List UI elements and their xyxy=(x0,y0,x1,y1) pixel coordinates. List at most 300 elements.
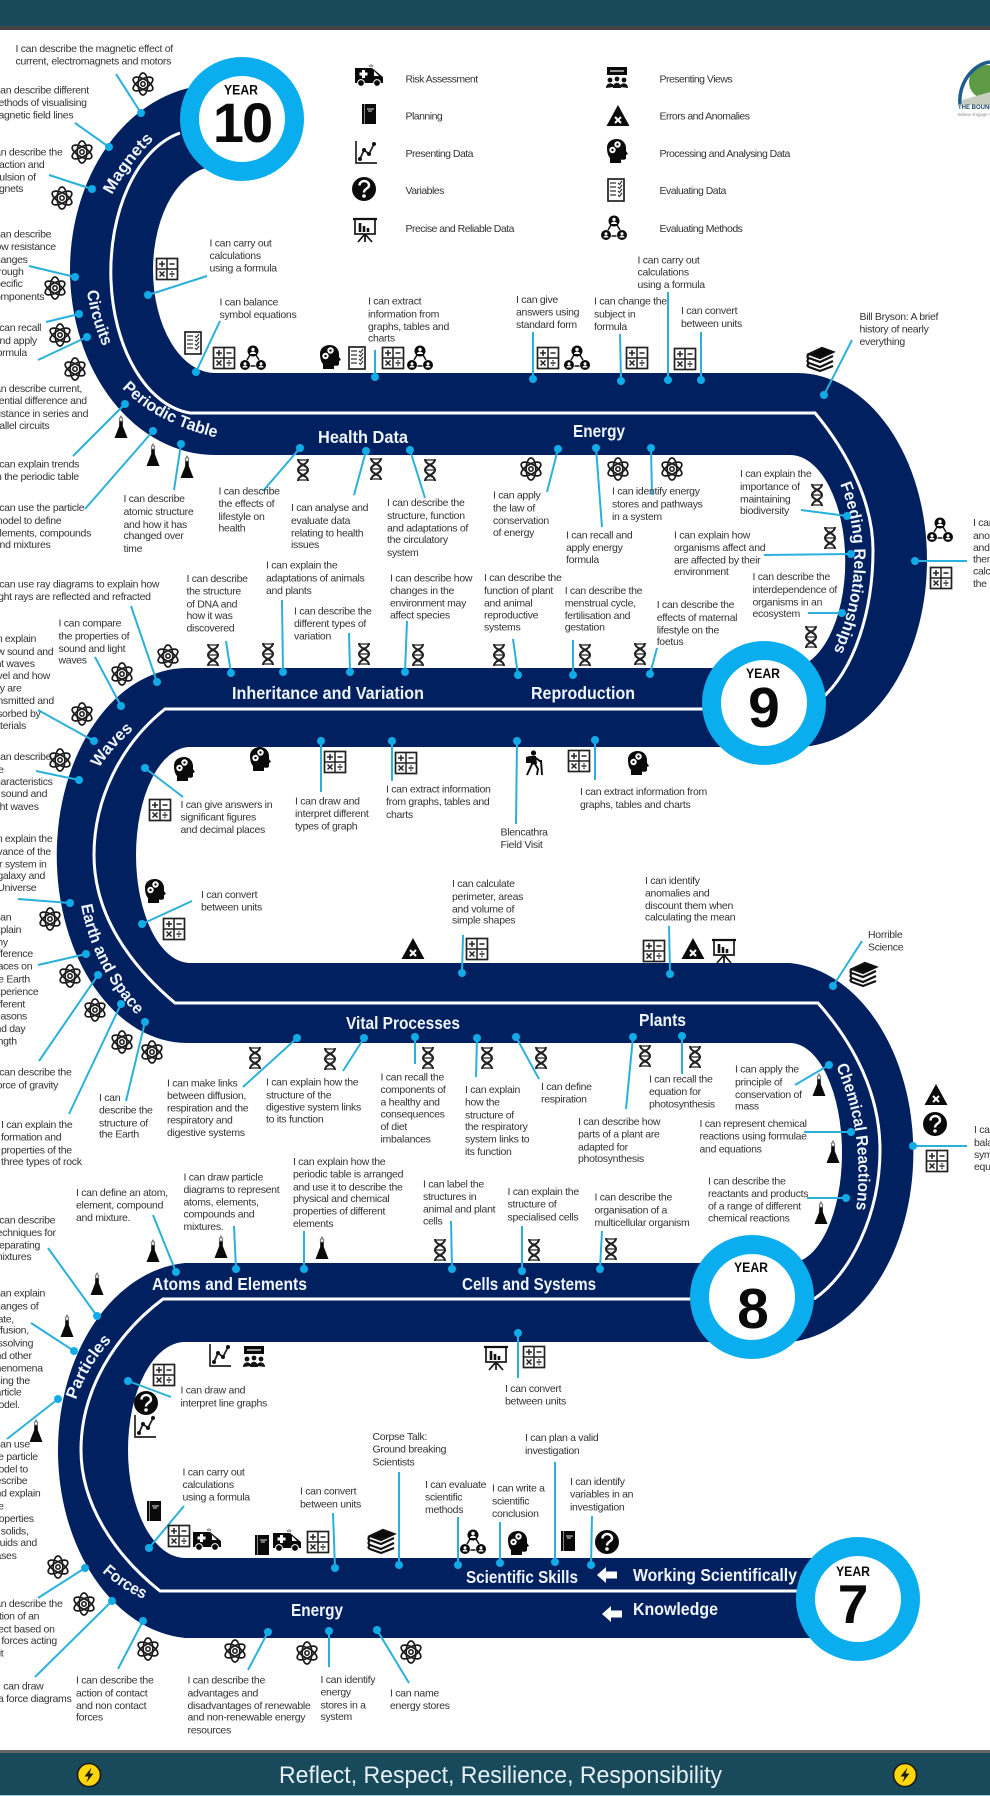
icon: atom xyxy=(83,999,107,1021)
callout: define atom: and mixture. xyxy=(76,1212,130,1224)
callout: organisms and environment: are affected by their xyxy=(674,555,761,567)
callout: healthy diet xyxy=(380,1033,446,1146)
callout: energy stores and pathways: stores and pathways xyxy=(612,498,703,510)
callout: motion and forces xyxy=(0,1564,89,1659)
callout: resistance xyxy=(0,229,79,303)
callout: convert units: between units xyxy=(681,318,742,330)
callout: periodic table arrangement: physical and chemical xyxy=(293,1193,389,1205)
icon: atom xyxy=(136,1638,160,1660)
callout: variation: I can describe the xyxy=(294,605,372,617)
icon: dna xyxy=(435,1239,445,1261)
callout: label cells: structures in xyxy=(423,1191,477,1203)
callout: define respiration: I can define xyxy=(541,1081,592,1093)
callout: waves travel xyxy=(0,633,98,745)
callout: structure of the Earth: structure of xyxy=(99,1117,148,1129)
header bar xyxy=(0,0,990,30)
callout: health data: I can analyse and xyxy=(291,502,369,514)
icon: presenting views xyxy=(606,67,628,88)
callout: periodic table arrangement: properties of different xyxy=(293,1205,386,1217)
callout: specialised cells: I can explain the xyxy=(508,1186,579,1198)
callout: links between diffusion: respiratory and xyxy=(167,1114,233,1126)
callout: periodic table arrangement: periodic table is arranged xyxy=(293,1169,404,1181)
callout: Corpse Talk: Scientists xyxy=(372,1456,414,1468)
icon: atom xyxy=(399,1641,423,1663)
callout: conservation of energy: the law of xyxy=(493,502,535,514)
icon: calculator xyxy=(150,800,170,820)
callout: health data xyxy=(291,447,370,551)
heading: Forces: Forces xyxy=(102,1564,146,1598)
icon: atom xyxy=(70,141,94,163)
icon: atom xyxy=(72,1593,96,1615)
callout: structure of DNA: discovered xyxy=(186,623,235,635)
callout: calculations formula xyxy=(145,1466,250,1552)
track: year 8 to year 7 xyxy=(58,1263,858,1638)
callout: reproductive systems: reproductive xyxy=(484,609,539,621)
callout: plant adaptations: parts of a plant are xyxy=(578,1129,660,1141)
heading: Reproduction: Reproduction xyxy=(531,683,635,703)
callout: reproductive systems xyxy=(484,572,562,679)
callout: atomic structure: changed over xyxy=(124,530,184,542)
callout: particle diagrams: diagrams to represent xyxy=(184,1184,280,1196)
callout: multicellular organism xyxy=(594,1192,690,1273)
callout: multicellular organism: organisation of a xyxy=(594,1204,667,1216)
icon: flask xyxy=(60,1314,74,1337)
callout: significant figures: I can give answers in xyxy=(180,799,273,811)
icon: dna xyxy=(635,643,645,665)
callout: digestive system: I can explain how the xyxy=(266,1077,359,1089)
callout: Bill Bryson xyxy=(820,311,939,399)
callout: menstrual cycle: I can describe the xyxy=(565,585,643,597)
icon: presenting views xyxy=(243,1346,265,1367)
callout: reproductive systems: function of plant xyxy=(484,585,553,597)
callout: extract information: from graphs, tables and xyxy=(386,796,490,808)
callout: conservation of energy: I can apply xyxy=(493,490,542,502)
icon: flask xyxy=(114,416,128,438)
callout: particle diagrams: compounds and xyxy=(184,1208,255,1220)
callout: interdependence: interdependence of xyxy=(752,584,837,596)
icon: atom xyxy=(110,1031,134,1053)
callout: extract information: charts xyxy=(368,333,395,345)
callout: types of rock: I can explain the xyxy=(1,1119,73,1131)
callout: biodiversity: I can explain the xyxy=(740,468,812,480)
callout: convert units: I can convert xyxy=(505,1383,562,1395)
callout: maternal lifestyle: effects of maternal xyxy=(657,612,737,624)
callout: reactants and products: reactants and products xyxy=(708,1188,808,1200)
callout: periodic trends xyxy=(0,400,129,483)
icon: dna xyxy=(606,1238,616,1260)
callout: name energy stores xyxy=(373,1626,450,1712)
callout: evaluate methods: scientific xyxy=(425,1491,462,1503)
icon: planning xyxy=(362,104,376,124)
icon: errors xyxy=(402,938,424,959)
callout: circulatory system xyxy=(387,446,468,559)
callout: maternal lifestyle xyxy=(646,599,737,678)
icon: calculator xyxy=(626,348,648,368)
callout: energy formula: formula xyxy=(566,554,599,566)
icon: head xyxy=(508,1531,529,1555)
callout: conservation of energy: conservation xyxy=(493,515,549,527)
callout: standard form: I can give xyxy=(516,294,558,306)
callout: organisms and environment: I can explain how xyxy=(674,529,751,541)
callout: effects of lifestyle: the effects of xyxy=(218,498,275,510)
callout: respiratory system: its function xyxy=(465,1146,512,1158)
callout: define atom: element, compound xyxy=(76,1200,164,1212)
icon: calculator xyxy=(214,348,234,368)
badge: year 8: 8 xyxy=(737,1277,769,1341)
heading: Periodic Table: Periodic Table xyxy=(122,380,217,437)
icon: evaluating methods xyxy=(460,1530,486,1554)
callout: line graphs: I can draw and xyxy=(180,1385,246,1397)
callout: reactants and products: of a range of different xyxy=(708,1201,801,1213)
callout: circulatory system: the circulatory xyxy=(387,534,449,546)
callout: label cells: animal and plant xyxy=(423,1203,496,1215)
heading: Feeding Relationships: Feeding Relationships xyxy=(834,481,866,653)
arrow: knowledge xyxy=(602,1606,622,1622)
heading: Magnets: Magnets xyxy=(102,134,152,194)
icon: atom xyxy=(46,1556,70,1578)
callout: biodiversity: biodiversity xyxy=(740,505,790,517)
badge: year 9 xyxy=(712,650,816,756)
panel: curriculum track xyxy=(57,85,927,1638)
callout: convert units: I can convert xyxy=(201,889,258,901)
callout: calculations formula: I can carry out xyxy=(182,1466,245,1478)
icon: atom xyxy=(156,645,180,667)
callout: digestive system: structure of the xyxy=(266,1089,332,1101)
callout: structure of DNA: the structure xyxy=(186,586,241,598)
callout: perimeter and area xyxy=(452,878,523,977)
callout: ray diagrams xyxy=(0,579,161,686)
callout: calculations formula: calculations xyxy=(182,1479,234,1491)
callout: compare sound and light: I can compare xyxy=(58,618,122,630)
icon: head xyxy=(320,345,341,369)
callout: Blencathra field visit: Field Visit xyxy=(500,839,543,851)
callout: periodic table arrangement: I can explain how the xyxy=(293,1156,386,1168)
callout: atomic structure: time xyxy=(124,543,143,555)
callout: name energy stores: I can name xyxy=(390,1687,439,1699)
callout: change the subject: formula xyxy=(594,321,627,333)
callout: scientific conclusion: scientific xyxy=(492,1495,529,1507)
callout: calculations formula xyxy=(144,238,277,299)
callout: change the subject: subject in xyxy=(594,308,636,320)
icon: calculator xyxy=(396,752,416,774)
callout: types of rock xyxy=(1,1000,125,1168)
icon: evaluating methods xyxy=(407,346,433,370)
callout: identify variables: variables in an xyxy=(570,1489,634,1501)
callout: convert units: between units xyxy=(300,1498,361,1510)
icon: planner xyxy=(255,1535,269,1555)
callout: draw graphs: I can draw and xyxy=(295,795,360,807)
icon: dna xyxy=(371,458,381,480)
callout: contact forces: forces xyxy=(76,1712,103,1724)
callout: perimeter and area: simple shapes xyxy=(452,914,515,926)
icon: atom xyxy=(43,277,67,299)
icon: question xyxy=(595,1530,619,1554)
callout: Horrible Science: Horrible xyxy=(868,929,903,941)
callout: effects of lifestyle: lifestyle on xyxy=(218,511,265,523)
callout: conservation of mass: conservation of xyxy=(735,1089,802,1101)
icon: evaluating data xyxy=(608,179,624,201)
callout: significant figures xyxy=(141,764,273,836)
icon: calculator xyxy=(644,940,664,962)
callout: anomalies and mean: anomalies and xyxy=(645,887,710,899)
callout: chemical formulae: reactions using formulae xyxy=(700,1131,807,1143)
callout: balance symbol equations: I can balance xyxy=(220,297,279,309)
callout: compare sound and light: sound and light xyxy=(58,643,126,655)
panel: legend xyxy=(352,64,790,242)
callout: convert units: I can convert xyxy=(300,1486,357,1498)
callout: environment and species xyxy=(390,572,473,676)
callout: structure of the Earth: I can xyxy=(99,1092,121,1104)
icon: calculator xyxy=(382,348,404,368)
heading: Scientific Skills: Scientific Skills xyxy=(466,1567,578,1587)
callout: standard form xyxy=(516,294,580,383)
callout: environment and species: I can describe how xyxy=(390,572,473,584)
callout: digestive system xyxy=(266,1034,368,1125)
callout: magnetic effect xyxy=(16,43,173,117)
callout: maternal lifestyle: lifestyle on the xyxy=(657,625,719,637)
callout: renewable energy: resources xyxy=(188,1724,231,1736)
callout: properties of solids, liquids and gases xyxy=(0,1395,62,1562)
callout: renewable energy xyxy=(188,1628,311,1736)
callout: reactants and products: chemical reactions xyxy=(708,1212,790,1224)
callout: contact forces: I can describe the xyxy=(76,1675,154,1687)
icon: flask xyxy=(90,1272,104,1295)
callout: identify variables: investigation xyxy=(570,1501,625,1513)
callout: conservation of mass: mass xyxy=(735,1101,759,1113)
icon: atom xyxy=(140,1041,164,1063)
callout: define respiration xyxy=(512,1033,592,1106)
callout: structure of the Earth: the Earth xyxy=(99,1129,139,1141)
callout: interdependence: organisms in an xyxy=(752,596,823,608)
callout: energy stores in a system: I can identify xyxy=(320,1674,376,1686)
callout: Bill Bryson: history of nearly xyxy=(860,324,930,336)
callout: Horrible Science: Science xyxy=(868,942,904,954)
legend label: evaluating data: Evaluating Data xyxy=(660,185,727,197)
callout: interdependence xyxy=(752,571,846,620)
icon: calculator xyxy=(154,1364,174,1386)
callout: renewable energy: and non-renewable energy xyxy=(188,1712,306,1724)
callout: reproductive systems: I can describe the xyxy=(484,572,562,584)
callout: circulatory system: structure, function xyxy=(387,510,465,522)
callout: label cells: cells xyxy=(423,1215,443,1227)
callout: specialised cells: structure of xyxy=(508,1199,557,1211)
callout: structure of the Earth xyxy=(99,1018,153,1141)
callout: scientific conclusion: conclusion xyxy=(492,1508,539,1520)
icon: atom xyxy=(50,187,74,209)
icon: calculator xyxy=(524,1346,544,1368)
callout: balance symbol equations xyxy=(192,297,296,376)
icon: dna xyxy=(812,484,822,506)
heading: Vital Processes: Vital Processes xyxy=(346,1013,460,1033)
callout: variation: different types of xyxy=(294,618,366,630)
icon: checklist xyxy=(349,347,365,369)
callout: particle diagrams xyxy=(184,1171,280,1273)
icon: books xyxy=(368,1530,394,1553)
icon: ambulance xyxy=(273,1529,301,1551)
callout: plan investigation xyxy=(525,1432,599,1566)
callout: extract information: I can extract information from xyxy=(580,786,708,798)
callout: define atom xyxy=(76,1187,180,1276)
callout: scientific conclusion: I can write a xyxy=(492,1483,545,1495)
callout: reproductive systems: and animal xyxy=(484,597,532,609)
legend label: processing and analysing data: Processing and Analysing Data xyxy=(660,148,790,160)
badge: year 7 xyxy=(806,1546,910,1652)
callout: name energy stores: energy stores xyxy=(390,1700,450,1712)
icon: errors and anomalies xyxy=(606,105,630,126)
callout: biodiversity: maintaining xyxy=(740,494,791,506)
icon: calculator xyxy=(538,348,558,368)
callout: respiratory system: I can explain xyxy=(465,1084,521,1096)
callout: adaptations: I can explain the xyxy=(266,560,338,572)
callout: renewable energy: I can describe the xyxy=(188,1675,265,1687)
callout: standard form: standard form xyxy=(516,319,577,331)
callout: calculations formula: I can carry out xyxy=(210,238,272,250)
callout: draw graphs xyxy=(295,737,369,833)
badge: year 9: 9 xyxy=(748,676,780,740)
icon: planner xyxy=(561,1531,575,1551)
heading: Working Scientifically: Working Scientifically xyxy=(633,1565,797,1585)
heading: Earth and Space: Earth and Space xyxy=(81,904,142,1014)
callout: interdependence: ecosystem xyxy=(752,608,801,620)
callout: conservation of mass xyxy=(735,1061,833,1113)
callout: periodic table arrangement xyxy=(293,1156,404,1273)
callout: respiratory system: system links to xyxy=(465,1134,530,1146)
legend label: presenting data: Presenting Data xyxy=(406,148,474,160)
icon: atom xyxy=(660,458,684,480)
callout: extract information: graphs, tables and xyxy=(368,321,449,333)
callout: organisms and environment xyxy=(674,529,855,578)
icon: dna xyxy=(423,1047,433,1069)
callout: environment and species: environment may xyxy=(390,597,467,609)
callout: contact forces: action of contact xyxy=(76,1687,148,1699)
icon: flask xyxy=(812,1074,826,1096)
callout: extract information: charts xyxy=(386,809,413,821)
callout: chemical formulae xyxy=(700,1118,855,1155)
callout: multicellular organism: multicellular organism xyxy=(594,1217,690,1229)
heading: Energy (year 7): Energy xyxy=(291,1600,343,1620)
icon: atom xyxy=(606,458,630,480)
callout: atomic structure: atomic structure xyxy=(124,506,194,518)
callout: anomalies and mean xyxy=(645,875,736,978)
callout: healthy diet: components of xyxy=(380,1084,446,1096)
callout: plant adaptations xyxy=(578,1033,661,1165)
callout: energy formula: apply energy xyxy=(566,542,624,554)
icon: dna xyxy=(325,1048,335,1070)
callout: calculations formula: using a formula xyxy=(182,1491,250,1503)
callout: magnetic effect: I can describe the magnetic effect of xyxy=(16,43,173,55)
callout: particle diagrams: mixtures. xyxy=(184,1221,223,1233)
callout: menstrual cycle: fertilisation and xyxy=(565,610,631,622)
callout: convert units: between units xyxy=(505,1395,566,1407)
badge: year 8 xyxy=(700,1244,804,1350)
callout: calculations formula: calculations xyxy=(210,250,261,262)
logo: school crest xyxy=(958,62,990,117)
icon: dna xyxy=(298,459,308,481)
callout: links between diffusion xyxy=(167,1034,301,1139)
icon: dna xyxy=(580,644,590,666)
callout: structure of DNA: of DNA and xyxy=(186,598,238,610)
callout: structure of DNA xyxy=(186,573,248,677)
callout: reactants and products: I can describe the xyxy=(708,1175,786,1187)
callout: extract information xyxy=(368,296,449,381)
callout: menstrual cycle: menstrual cycle, xyxy=(565,597,636,609)
callout: energy stores and pathways xyxy=(612,444,703,523)
callout: contact forces: and non contact xyxy=(76,1700,147,1712)
callout: identify variables xyxy=(570,1476,634,1569)
callout: healthy diet: of diet xyxy=(380,1121,407,1133)
icon: head xyxy=(628,751,649,775)
callout: conservation of mass: I can apply the xyxy=(735,1064,799,1076)
icon: atom xyxy=(58,965,82,987)
callout: energy formula: I can recall and xyxy=(566,529,633,541)
callout: atomic structure: and how it has xyxy=(124,519,187,531)
callout: healthy diet: consequences xyxy=(380,1109,445,1121)
callout: health data: issues xyxy=(291,539,319,551)
callout: characteristics of waves xyxy=(0,751,83,813)
callout: respiratory system: how the xyxy=(465,1097,500,1109)
callout: conservation of energy xyxy=(493,445,562,539)
callout: calculations formula: calculations xyxy=(638,267,689,279)
icon: graph xyxy=(135,1415,156,1437)
callout: healthy diet: I can recall the xyxy=(380,1071,444,1083)
callout: conservation of energy: of energy xyxy=(493,527,535,539)
legend label: presenting views: Presenting Views xyxy=(660,74,732,86)
icon: dna xyxy=(494,644,504,666)
heading: Waves: Waves xyxy=(90,724,132,766)
callout: solar system xyxy=(0,833,74,907)
callout: links between diffusion: between diffusion, xyxy=(167,1090,246,1102)
icon: calculator xyxy=(324,752,346,772)
callout: force diagrams xyxy=(0,1597,116,1705)
callout: plant adaptations: I can describe how xyxy=(578,1116,661,1128)
legend label: precise and reliable data: Precise and Reliable Data xyxy=(406,223,515,235)
icon: evaluating methods xyxy=(240,346,266,370)
callout: biodiversity xyxy=(740,468,851,520)
callout: extract information xyxy=(386,737,491,821)
callout: respiratory system xyxy=(465,1034,530,1158)
callout: contact forces xyxy=(76,1617,154,1724)
icon: dna xyxy=(413,644,423,666)
callout: conservation of mass: principle of xyxy=(735,1076,783,1088)
callout: energy stores in a system: energy xyxy=(320,1687,352,1699)
callout: chemical formulae: and equations xyxy=(700,1143,762,1155)
callout: balance symbol equations: symbol equations xyxy=(220,309,296,321)
icon: dna xyxy=(359,643,369,665)
callout: extract information: I can extract xyxy=(368,296,422,308)
callout: atomic structure: I can describe xyxy=(124,493,185,505)
callout: types of rock: three types of rock xyxy=(1,1156,83,1168)
badge: year 9: YEAR xyxy=(746,666,780,681)
icon: risk assessment xyxy=(355,64,383,86)
callout: compare sound and light xyxy=(58,618,130,710)
heading: Energy (year 10): Energy xyxy=(573,421,625,441)
callout: reactants and products xyxy=(708,1175,850,1224)
callout: digestive system: digestive system links xyxy=(266,1102,361,1114)
icon: atom xyxy=(48,749,72,771)
callout: photosynthesis equation: photosynthesis xyxy=(649,1099,715,1111)
callout: respiratory system: structure of xyxy=(465,1109,514,1121)
icon: evaluating methods xyxy=(601,216,627,240)
callout: calculations formula xyxy=(638,254,705,384)
icon: processing and analysing data xyxy=(607,139,628,163)
icon: atom xyxy=(223,1640,247,1662)
callout: periodic table arrangement: elements xyxy=(293,1218,333,1230)
callout: effects of lifestyle xyxy=(218,444,304,535)
legend label: variables: Variables xyxy=(406,185,444,197)
callout: anomalies (right edge) xyxy=(911,517,990,590)
callout: particle diagrams: atoms, elements, xyxy=(184,1197,259,1209)
callout: convert units xyxy=(681,305,742,384)
